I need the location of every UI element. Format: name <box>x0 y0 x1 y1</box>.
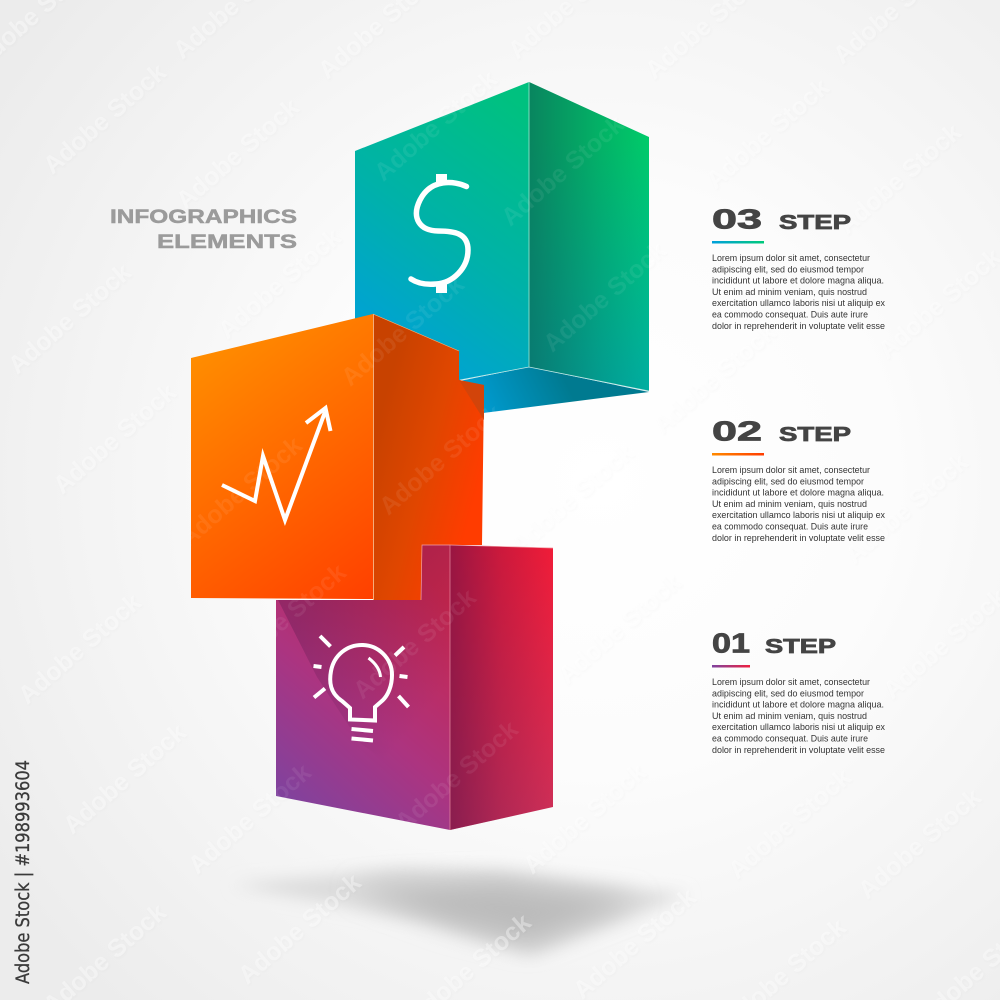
step 02 body: ea commodo consequat. Duis aute irure <box>712 522 868 532</box>
watermark: Adobe Stock over cubes: Adobe Stock <box>374 399 508 521</box>
step 03 heading: STEP <box>779 211 851 234</box>
cube 03: teal <box>355 82 649 413</box>
teal front face <box>355 82 529 400</box>
watermark: Adobe Stock over cubes: Adobe Stock <box>183 758 317 880</box>
watermark: Adobe Stock pattern on background: Adobe Stock <box>840 448 974 570</box>
step 03 body: ea commodo consequat. Duis aute irure <box>712 310 868 320</box>
watermark: Adobe Stock pattern on background: Adobe Stock <box>701 73 835 195</box>
step 02 underline <box>712 453 764 456</box>
step 02 heading <box>712 416 851 446</box>
watermark: Adobe Stock pattern on background: Adobe Stock <box>38 58 172 180</box>
step 02 body: dolor in reprehenderit in voluptate velit esse <box>712 533 885 544</box>
watermark: Adobe Stock pattern on background: Adobe Stock <box>518 758 652 880</box>
step 02 body: incididunt ut labore et dolore magna aliqua. <box>712 488 884 499</box>
step 03 heading <box>712 204 851 234</box>
step 02 heading: STEP <box>779 423 851 446</box>
step 02 text block <box>712 416 885 544</box>
watermark: Adobe Stock pattern on background: Adobe Stock <box>183 758 317 880</box>
watermark: Adobe Stock pattern on background: Adobe Stock <box>369 65 503 187</box>
step 02 body: Ut enim ad minim veniam, quis nostrud <box>712 499 867 510</box>
watermark: Adobe Stock over cubes: Adobe Stock <box>496 110 630 232</box>
step 01 heading: STEP <box>765 635 836 658</box>
icon: rising chart arrow <box>222 408 330 520</box>
step 03 text block <box>712 204 885 332</box>
watermark: Adobe Stock over cubes: Adobe Stock <box>336 270 470 392</box>
title: INFOGRAPHICS <box>110 206 297 228</box>
step 01 body: incididunt ut labore et dolore magna aliqua. <box>712 700 884 711</box>
watermark: Adobe Stock pattern on background: Adobe Stock <box>13 588 147 710</box>
icon: dollar sign <box>411 174 468 293</box>
watermark: Adobe Stock over cubes: Adobe Stock <box>538 236 672 358</box>
watermark: Adobe Stock pattern on background: Adobe Stock <box>213 223 347 345</box>
orange right face <box>373 314 484 600</box>
watermark: Adobe Stock pattern on background: Adobe Stock <box>3 258 137 380</box>
watermark: Adobe Stock over cubes: Adobe Stock <box>218 558 352 680</box>
step 01 text block <box>712 628 885 756</box>
step 03 body: incididunt ut labore et dolore magna aliqua. <box>712 276 884 287</box>
watermark: Adobe Stock over cubes: Adobe Stock <box>213 223 347 345</box>
step 01 body: adipiscing elit, sed do eiusmod tempor <box>712 688 864 699</box>
watermark: Adobe Stock pattern on background: Adobe Stock <box>723 763 857 885</box>
orange notch shade <box>459 380 484 420</box>
step 01 body: exercitation ullamco laboris nisi ut aliquip ex <box>712 722 885 733</box>
step 01 body: ea commodo consequat. Duis aute irure <box>712 734 868 744</box>
watermark: Adobe Stock pattern on background: Adobe Stock <box>496 110 630 232</box>
step 01 heading: 01 <box>712 628 750 658</box>
watermark: Adobe Stock over cubes: Adobe Stock <box>390 715 524 837</box>
watermark: Adobe Stock pattern on background: Adobe Stock <box>48 378 182 500</box>
cube 01: red <box>276 545 553 830</box>
stock id caption: Adobe Stock | #198993604 <box>13 760 34 984</box>
watermark: Adobe Stock pattern on background: Adobe Stock <box>233 868 367 990</box>
step 03 body <box>712 253 885 332</box>
teal bottom face <box>440 367 649 413</box>
step 01 underline <box>712 665 750 668</box>
title <box>110 206 297 253</box>
step 01 body: Ut enim ad minim veniam, quis nostrud <box>712 711 867 722</box>
watermark: Adobe Stock over cubes <box>174 65 672 880</box>
step 01 body: dolor in reprehenderit in voluptate velit esse <box>712 745 885 756</box>
step 01 heading <box>712 628 836 658</box>
watermark: Adobe Stock pattern on background: Adobe Stock <box>648 318 782 440</box>
step 03 body: exercitation ullamco laboris nisi ut aliquip ex <box>712 298 885 309</box>
step 02 body: exercitation ullamco laboris nisi ut aliquip ex <box>712 510 885 521</box>
red front shadow <box>278 545 450 805</box>
watermark: Adobe Stock pattern on background: Adobe Stock <box>538 236 672 358</box>
watermark: Adobe Stock pattern on background: Adobe Stock <box>58 718 192 840</box>
step 03 body: adipiscing elit, sed do eiusmod tempor <box>712 264 864 275</box>
step 02 body: Lorem ipsum dolor sit amet, consectetur <box>712 465 870 476</box>
step 03 heading: 03 <box>712 204 762 234</box>
cube 02: orange <box>191 314 484 600</box>
watermark: Adobe Stock pattern on background: Adobe Stock <box>853 783 987 905</box>
watermark: Adobe Stock pattern on background: Adobe Stock <box>506 438 640 560</box>
red right face <box>450 545 553 830</box>
watermark: Adobe Stock pattern on background: Adobe Stock <box>171 93 305 215</box>
watermark: Adobe Stock pattern on background: Adobe Stock <box>553 568 687 690</box>
red front face <box>276 545 450 830</box>
step 01 body: Lorem ipsum dolor sit amet, consectetur <box>712 677 870 688</box>
step 01 body <box>712 677 885 756</box>
step 03 body: dolor in reprehenderit in voluptate velit esse <box>712 321 885 332</box>
title: ELEMENTS <box>157 231 297 253</box>
teal right face <box>529 82 649 391</box>
watermark: Adobe Stock over cubes: Adobe Stock <box>348 583 482 705</box>
step 03 underline <box>712 241 764 244</box>
step 02 body: adipiscing elit, sed do eiusmod tempor <box>712 476 864 487</box>
watermark: Adobe Stock over cubes: Adobe Stock <box>174 431 308 553</box>
floor shadow <box>232 868 688 955</box>
step 03 body: Ut enim ad minim veniam, quis nostrud <box>712 287 867 298</box>
orange front face <box>191 314 373 599</box>
step 02 heading: 02 <box>712 416 762 446</box>
step 02 body <box>712 465 885 544</box>
watermark: Adobe Stock pattern on background: Adobe Stock <box>833 118 967 240</box>
watermark: Adobe Stock over cubes: Adobe Stock <box>369 65 503 187</box>
step 03 body: Lorem ipsum dolor sit amet, consectetur <box>712 253 870 264</box>
icon: light bulb <box>314 636 408 740</box>
